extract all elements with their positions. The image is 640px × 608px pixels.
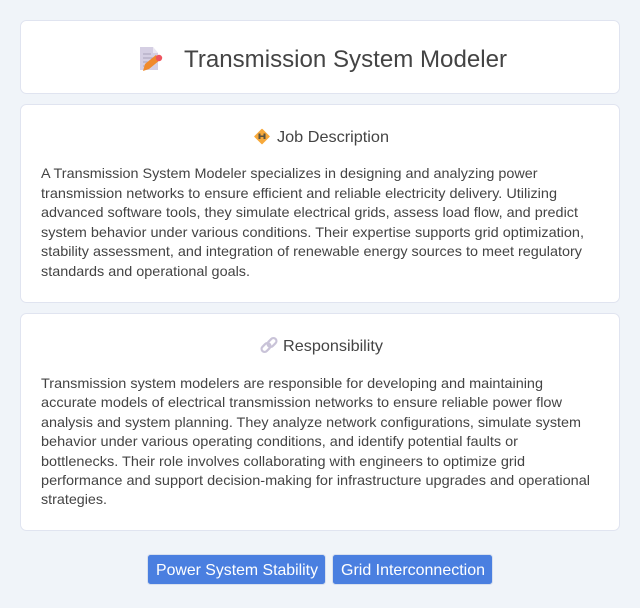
tag: power system stability <box>148 554 326 584</box>
panel: title card <box>20 20 620 94</box>
icon: chain link <box>260 337 278 353</box>
tag: grid interconnection <box>332 554 492 584</box>
title: Transmission System Modeler <box>184 46 507 73</box>
text block: responsibility: performance and support decision-making for infrastructure upgrades and operational <box>41 472 590 488</box>
text block: responsibility: strategies. <box>41 491 107 507</box>
icon: document with pencil <box>140 47 162 71</box>
text block: responsibility: analysis and system planning. They analyze network configurations, simulate system <box>41 414 581 430</box>
panel: job description <box>20 104 620 302</box>
heading: job description: Job Description <box>277 129 389 146</box>
text block: job description: system behavior under various conditions. Their expertise supports grid optimization, <box>41 224 584 240</box>
tag: power system stability: Power System Stability <box>156 562 318 579</box>
text block: responsibility: behavior under various operating conditions, and identify potential faults or <box>41 433 518 449</box>
text block: responsibility <box>41 375 590 507</box>
text block: responsibility: Transmission system modelers are responsible for developing and maintaining <box>41 375 543 391</box>
text block: responsibility: bottlenecks. Their role involves collaborating with engineers to optimize grid <box>41 453 525 469</box>
text block: job description: A Transmission System Modeler specializes in designing and analyzing power <box>41 165 538 181</box>
text block: responsibility: accurate models of electrical transmission networks to ensure reliable power flow <box>41 394 563 410</box>
panel: responsibility <box>20 314 620 530</box>
text block: job description: advanced software tools, they simulate electrical grids, assess load flow, and predict <box>41 204 578 220</box>
tag: grid interconnection: Grid Interconnection <box>341 562 485 579</box>
text block: job description <box>41 165 584 279</box>
text block: job description: stability assessment, and integration of renewable energy sources to meet regulatory <box>41 243 582 259</box>
icon: diamond road sign <box>255 130 269 144</box>
heading: responsibility: Responsibility <box>283 338 383 355</box>
text block: job description: transmission networks to ensure efficient and reliable electricity delivery. Utilizing <box>41 185 557 201</box>
text block: job description: standards and operational goals. <box>41 263 250 279</box>
